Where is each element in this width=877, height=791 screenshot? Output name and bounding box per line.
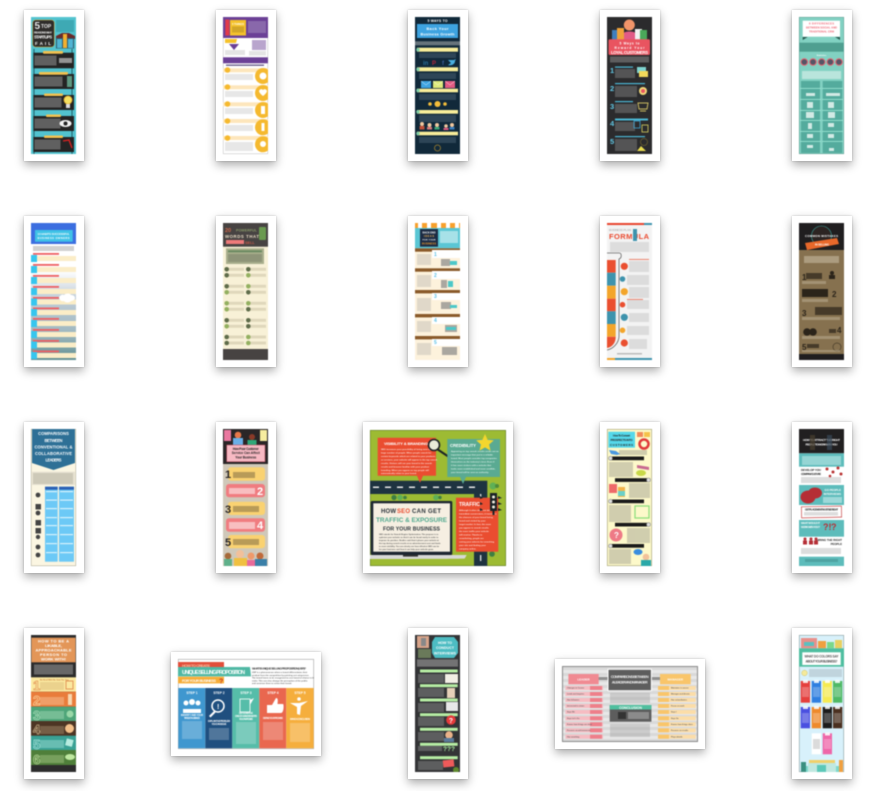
panel: traffic: TRAFFIC: [459, 502, 480, 508]
title ribbon: 8 DIFFERENCES: [809, 22, 834, 26]
tip illustrations: ?: [449, 718, 453, 725]
crowd of people: [224, 550, 267, 566]
title ribbon: BETWEEN SOCIAL AND: [806, 26, 837, 30]
laptop with headline: FOR YOUR BUSINESS: [383, 526, 441, 532]
dark title header: [223, 223, 268, 247]
card: comparisons between a leader and manager: Says We: [567, 712, 575, 714]
title banner: Reward Your: [614, 46, 645, 50]
card: how to create a unique selling proposition: ONE-OF-A-KIND BENEFITS: [235, 715, 257, 718]
header photos: [417, 636, 431, 658]
step icons: !: [217, 704, 219, 711]
panel: traffic: will receive. Thanks to: [459, 534, 483, 536]
awning: [415, 223, 460, 228]
numbered mistakes: 5: [802, 343, 807, 352]
numbered tags: [432, 250, 460, 346]
numbered rows: 5: [610, 137, 614, 146]
icon: loyalty cards: [637, 67, 648, 77]
title ribbons: ?: [219, 678, 223, 686]
card: comparisons between a leader and manager: Focus on work: [671, 706, 685, 708]
card: business plan formula: [600, 216, 660, 367]
numbered rows: 4: [610, 119, 615, 128]
panel: credibility: looks more established and more credible,: [451, 468, 496, 470]
columns: traditional and social CRM: [800, 81, 843, 153]
word rows: [228, 268, 266, 344]
numbered mistakes: 1: [802, 273, 807, 282]
title board: FOR YOUR: [422, 240, 436, 242]
panel: visibility and branding: [378, 438, 438, 483]
dark title header: SELL: [245, 241, 255, 245]
laptop with headline: improve its position. Studies said that it places your website at: [379, 539, 439, 542]
title hexagon: INTERVIEWS: [434, 652, 457, 656]
icon: cart: [638, 103, 648, 111]
blue header: [31, 223, 76, 244]
card: how to create a unique selling proposition: DEFINE YOUR PROMISE: [263, 717, 283, 720]
usp explanation: USP is a phenomenon where a brand differentiates their: [252, 671, 307, 674]
card: common mistakes in selling: [792, 216, 852, 367]
panel: traffic: immediate conversions, it increases: [459, 512, 497, 516]
card: 5 reasons why startups fail: [24, 10, 84, 161]
icon: network of dots: [826, 466, 842, 477]
dark header: PEOPLE TO WORK WITH YOU: [806, 442, 838, 446]
intro box: [226, 248, 264, 264]
title board: [420, 229, 438, 247]
laptop with headline: optimize your website so that it can be found easily in order to: [379, 536, 439, 539]
title block: PERSON TO: [40, 652, 67, 657]
dark header with banner: [799, 223, 844, 250]
icon: bulb: [434, 145, 440, 151]
card: how to create a unique selling proposition: YOU CAN SOLVE: [212, 723, 227, 726]
panel: visibility and branding: VISIBILITY & BRANDING: [384, 441, 428, 446]
icon: person: [829, 271, 835, 279]
card: back end ideas for your business: [408, 216, 468, 367]
card: what do colors say about your business: [792, 628, 852, 779]
card: things about a purple infographic: [216, 10, 276, 161]
card: how to create a unique selling proposition: LIST DOWN THE: [239, 712, 253, 715]
purple header: 5 THINGS: [232, 22, 244, 26]
dark header: HOW TO ATTRACT THE RIGHT: [803, 438, 840, 442]
dark header with agents: [223, 429, 268, 464]
title box: WHAT DO COLORS SAY: [804, 654, 839, 658]
panel: traffic: the chances of your brand being: [459, 516, 493, 519]
card: how to create a unique selling proposition: STEP 3: [240, 691, 252, 695]
icons: people: [420, 122, 454, 130]
title box: How Poor Customer: [233, 447, 260, 451]
formula steps: [620, 263, 628, 347]
panel: visibility and branding: results and become familiar with your product: [381, 466, 429, 468]
card: comparisons between a leader and manager: Manages and directs: [671, 693, 690, 696]
numbered mistakes: 4: [837, 326, 842, 335]
comparison columns: [45, 487, 74, 562]
title: 5 WAYS TO: [428, 19, 448, 23]
title block: LIKABLE,: [45, 643, 62, 648]
numbered mistakes: 3: [802, 309, 807, 318]
panel: visibility and branding: branding. When you appear on top people will: [381, 469, 429, 472]
numbered rows: [610, 66, 615, 146]
card: how poor customer service can affect your business: 5: [225, 537, 231, 549]
shop skyline: [801, 638, 842, 648]
card: comparisons between conventional and collaborative leaders: [24, 422, 84, 573]
six tip bands: [31, 677, 76, 765]
tip illustrations: ???: [443, 746, 455, 753]
title pennant: LEADERS: [46, 458, 62, 462]
icon: people: [803, 538, 818, 544]
card: comparisons between a leader and manager: Knows how things done: [671, 723, 693, 726]
panel: traffic: remarketing, people are: [459, 537, 484, 540]
panel: visibility and branding: SEO increases your possibility of being seen by a: [381, 448, 434, 451]
panel: traffic: found and visited by your: [459, 520, 486, 522]
icon: gifts: [634, 121, 648, 132]
panel: credibility: themselves as the industry's best. Even if: [451, 460, 495, 464]
category icons: [36, 493, 41, 557]
title ribbons: UNIQUE SELLING PROPOSITION: [182, 670, 245, 676]
laptop with headline: for your business and how it can help your website grow.: [379, 548, 434, 551]
panel: traffic: the more traffic your website: [459, 530, 490, 533]
panel: credibility: [447, 439, 500, 484]
illustrations: ?: [614, 531, 619, 540]
title box: [227, 445, 265, 462]
title banner: 5 Ways to: [620, 42, 640, 46]
card: how to be a likable approachable person to work with: 1: [33, 678, 40, 693]
card: habits of successful business owners: [24, 216, 84, 367]
title box: Service Can Affect: [232, 451, 261, 455]
card: back end ideas for your business: 4: [434, 318, 437, 324]
icon: magnifying glass: [428, 440, 449, 457]
card: how to create a unique selling proposition: [171, 652, 321, 756]
panel: visibility and branding: or services, your website will appear in the top search: [381, 458, 438, 462]
test tube chart: [607, 253, 621, 350]
title: PROSPECTS INTO: [610, 438, 633, 442]
dark title header: POWERFUL: [236, 228, 258, 232]
laptop with headline: [370, 501, 467, 559]
interview tips: [420, 670, 458, 759]
conclusion box: CONCLUSION: [619, 706, 642, 710]
icon: bulb: [802, 670, 807, 676]
card: comparisons between a leader and manager: Says Let's Go: [567, 717, 580, 720]
dark title header: WORDS THAT: [225, 234, 259, 239]
panel: visibility and branding: automatically relate to your brand.: [381, 472, 417, 475]
card: comparisons between a leader and manager: Says I: [671, 712, 677, 714]
usp explanation: The brand learns to be recognized as one brand of choice in the: [252, 677, 314, 680]
title badge: TOP: [41, 24, 52, 30]
card: comparisons between a leader and manager: Focuses on achievements: [567, 729, 591, 732]
card: comparisons between a leader and manager: Focuses on results: [671, 729, 688, 732]
laptop with headline: TRAFFIC & EXPOSURE: [376, 517, 448, 524]
laptop with headline: HOW: [381, 509, 396, 515]
dark header: [799, 429, 844, 453]
title ribbons: [178, 662, 251, 686]
title: [609, 228, 650, 241]
title badge: REASONS WHY: [34, 30, 52, 34]
card: how to create a unique selling proposition: STEP 5: [294, 691, 306, 695]
card: how to create a unique selling proposition: STEP 2: [213, 691, 225, 695]
card: how poor customer service can affect your business: 4: [257, 520, 264, 532]
title hexagon: [432, 637, 458, 658]
card: comparisons between a leader and manager: Knows how things are done: [567, 723, 592, 726]
usp explanation: product from the competition by pointing out uniqueness.: [252, 674, 310, 677]
icons: social: in: [423, 61, 429, 67]
panel: credibility: Appearing on top search results sends out an: [451, 450, 499, 453]
card: comparisons between a leader and manager: Has coaching: [567, 736, 580, 738]
centre title: [608, 669, 651, 691]
card: difference between social and traditional CRM: Statistics: [817, 54, 827, 57]
title: Back Your: [426, 27, 449, 31]
wooden shelves: [415, 248, 460, 339]
panel: visibility and branding: certain keywords which are related to your products: [381, 455, 436, 458]
card: how to conduct interviews: [408, 628, 468, 779]
card: how to attract the right people to work with you: WORK WITH YOU?: [801, 525, 820, 529]
card: how to create a unique selling proposition: YOU CAN PROVIDE: [239, 718, 253, 721]
laptop with headline: the top during search results at no advertisement cost and leads: [379, 542, 441, 545]
icon: question marks: [823, 522, 836, 532]
five topic rows: [223, 68, 268, 140]
manager rows: [659, 686, 696, 739]
centre title: COMPARISONS BETWEEN: [611, 674, 649, 679]
usp explanation: WHAT IS UNIQUE SELLING PROPOSITION (USP)?: [252, 666, 306, 670]
icon: money burst: [639, 87, 647, 95]
title ribbons: HOW TO CREATE: [182, 663, 210, 668]
usp explanation: niche. This can also change the perception of the public: [252, 679, 308, 682]
storefront: [801, 760, 843, 772]
title block: [32, 638, 76, 662]
card: how to create a unique selling proposition: TARGET AUDIENCE: [184, 717, 200, 720]
title hexagon: CONDUCT: [436, 646, 455, 650]
title badge: [33, 20, 54, 47]
card: how to attract the right people to work with you: HIRING THE RIGHT: [816, 538, 842, 542]
panel: traffic: you appear in search results: [459, 526, 489, 530]
title board: BACK END: [422, 232, 436, 234]
card: comparisons between a leader and manager: Has subordinates: [671, 699, 687, 702]
panel: credibility: CREDIBILITY: [450, 443, 476, 448]
heading: manager: MANAGER: [668, 678, 684, 682]
title ribbon: TRADITIONAL CRM: [809, 29, 835, 33]
title board: BUSINESS: [422, 242, 436, 246]
icons: social: f: [442, 61, 445, 67]
card: how to attract the right people to work with you: WHAT WOULD IT: [801, 521, 820, 525]
usp explanation: and convince them to select their brand.: [252, 682, 292, 685]
callout: placement: GET PLACEMENT MUST BE RIGHT: [805, 508, 838, 512]
panel: traffic: your site and finding your: [459, 544, 486, 547]
alternating bands: [799, 453, 844, 566]
five step columns: [178, 688, 314, 748]
card: 20 powerful words that sell: [216, 216, 276, 367]
title banner: LOYAL CUSTOMERS: [611, 50, 648, 55]
ten habit rows: [33, 253, 59, 352]
card: how to attract the right people to work with you: GO PEOPLE: [825, 488, 841, 492]
title: CUSTOMERS: [610, 443, 633, 447]
panel: credibility: it has more visitors with a website that: [451, 464, 491, 467]
panel: credibility: brand. Most people consider top companies: [451, 457, 498, 460]
title block: WORK WITH!: [41, 656, 66, 662]
title box: ABOUT YOUR BUSINESS?: [806, 660, 838, 664]
numbered mistakes: [802, 273, 842, 352]
card: how SEO can get traffic and exposure: [363, 422, 513, 573]
title ribbon: [803, 21, 840, 40]
panel: traffic: company online.: [459, 548, 477, 550]
card: comparisons between a leader and manager: Says Go: [671, 718, 679, 720]
icons: [65, 681, 75, 760]
dark header with banner: COMMON MISTAKES: [805, 234, 838, 238]
card: back end ideas for your business: 1: [434, 252, 437, 258]
title ribbons: FOR YOUR BUSINESS: [182, 679, 217, 683]
title box: Your Business: [235, 456, 257, 460]
card: how to create a unique selling proposition: MAKE A CONCLUSION: [290, 718, 310, 721]
icon: star: [476, 434, 494, 451]
card: how to be a likable approachable person to work with: [24, 628, 84, 779]
card: comparisons between a leader and manager: Has followers: [567, 700, 579, 702]
panel: visibility and branding: large number of people. When people search for: [381, 452, 431, 454]
icons: social: P: [432, 61, 436, 67]
reason panels: [33, 53, 74, 152]
title badge: STARTUPS: [34, 34, 52, 40]
panel: traffic: target market. In fact, the more: [459, 523, 492, 526]
card: comparisons between a leader and manager: Changes in Course: [567, 688, 584, 690]
card: 5 ways to back your business growth: [408, 10, 468, 161]
card: how poor customer service can affect your business: 3: [225, 504, 231, 516]
title: [417, 19, 458, 38]
title: How To Convert: [613, 434, 630, 438]
card: how to create a unique selling proposition: IDENTIFY AND YOUR: [181, 714, 203, 717]
card: how to be a likable approachable person to work with: 4: [33, 722, 41, 737]
title: BUSINESS PLAN: [609, 228, 631, 232]
card: 5 ways to reward your loyal customers: [600, 10, 660, 161]
header graphics: [609, 432, 650, 455]
card: how to attract the right people to work with you: COMPANY CULTURE: [801, 472, 821, 476]
title block: HOW TO BE A: [38, 638, 69, 644]
usp explanation: [252, 666, 316, 685]
title: [608, 432, 635, 448]
card: how to create a unique selling proposition: EXPLAIN THE PROBLEM: [208, 720, 230, 723]
section strips: [417, 48, 458, 135]
panel: traffic: Although it often does not deliver: [459, 509, 494, 512]
blue header: 10 HABITS SUCCESSFUL: [38, 232, 70, 236]
card: back end ideas for your business: 3: [434, 294, 437, 300]
numbered mistakes: 2: [832, 290, 837, 299]
card: comparisons between a leader and manager: Leads and inspires: [567, 694, 584, 696]
card: how to be a likable approachable person to work with: 5: [33, 737, 40, 752]
card: comparisons between a leader and manager: Interested in vision: [567, 705, 585, 708]
five speech bubbles: [228, 467, 265, 548]
title badge: F A I L: [35, 41, 51, 46]
card: comparisons between a leader and manager: Maintains in course: [671, 687, 689, 690]
dark header with banner: IN SELLING: [815, 242, 829, 246]
card: how to create a unique selling proposition: STEP 4: [267, 691, 279, 695]
icon: speedometer: [63, 140, 72, 148]
card: how to attract the right people to work with you: PEOPLE: [831, 542, 842, 546]
title pennant: COLLABORATIVE: [35, 451, 72, 456]
title pennant: [32, 429, 75, 470]
card: how to attract the right people to work with you: [792, 422, 852, 573]
leader rows: [565, 686, 603, 739]
numbered rows: 1: [610, 66, 614, 75]
card: how poor customer service can affect your business: [216, 422, 276, 573]
title pennant: CONVENTIONAL &: [34, 444, 73, 450]
card: how to be a likable approachable person to work with: Be Kind With No Gain For You: [40, 678, 69, 682]
title banner: [608, 39, 650, 55]
five ring charts: [801, 59, 842, 65]
card: comparisons between a leader and manager: Plays details: [671, 735, 682, 738]
card: how to be a likable approachable person to work with: 3: [33, 708, 40, 723]
panel: visibility and branding: results. Visitors will see your brand in the search: [381, 462, 433, 465]
title: FORMULA: [609, 232, 650, 241]
section headings: [610, 456, 650, 548]
card: how poor customer service can affect your business: 2: [257, 486, 263, 498]
heading: leader: LEADER: [577, 678, 590, 682]
panel: traffic: seeing your adverts for searching: [459, 540, 495, 544]
numbered rows: 2: [610, 84, 614, 93]
panel: traffic: [456, 498, 498, 552]
icon: traffic light: [480, 493, 502, 515]
title board: IDEAS: [424, 235, 434, 238]
laptop with headline: CAN GET: [412, 509, 441, 515]
card: back end ideas for your business: 5: [434, 340, 437, 346]
card: back end ideas for your business: 2: [434, 273, 437, 279]
laptop with headline: SEO stands for Search Engine Optimization. The purpose is to: [379, 533, 439, 536]
title pennant: BETWEEN: [44, 438, 63, 443]
icon: shopper with bags: [612, 20, 647, 41]
icon: bulb: [64, 96, 72, 108]
panel: credibility: important message that you're a reliable: [451, 454, 494, 456]
centre title: A LEADER AND MANAGER: [612, 680, 648, 684]
icon: speech bubbles: [800, 488, 822, 504]
title box: [802, 652, 841, 665]
laptop with headline: SEO: [397, 509, 410, 515]
blue header: BUSINESS OWNERS: [38, 236, 70, 240]
icons: stars: [428, 101, 447, 107]
title pennant: COMPARISONS: [38, 431, 69, 436]
dark title header: 20: [225, 228, 231, 234]
icons: social: [423, 59, 456, 67]
numbered rows: 3: [610, 102, 614, 111]
title: Business Growth: [420, 32, 455, 36]
trees: [391, 482, 499, 557]
title hexagon: HOW TO: [438, 641, 452, 645]
card: how to attract the right people to work with you: INTERVIEWS: [824, 492, 841, 496]
laptop with headline: to more visibility. You can clearly see how effective SEO can be: [379, 545, 440, 548]
card: how to be a likable approachable person to work with: 6: [33, 752, 40, 767]
icon: question marks: ?: [831, 522, 836, 532]
card: how to create a unique selling proposition: STEP 1: [186, 691, 198, 695]
card: comparisons between a leader and manager: [555, 659, 705, 749]
card: how to attract the right people to work with you: DEVELOP YOU: [801, 468, 821, 472]
title block: APPROACHABLE: [36, 648, 72, 652]
road: [370, 481, 487, 566]
colour cards: [801, 681, 842, 754]
tip illustrations: [443, 674, 458, 768]
card: how to be a likable approachable person to work with: 2: [33, 693, 40, 708]
icon: eye: [60, 120, 72, 127]
card: how poor customer service can affect your business: 1: [225, 469, 231, 481]
icons: envelopes: [421, 81, 455, 88]
statistics section: [225, 39, 266, 56]
title badge: 5: [34, 21, 40, 32]
icon: storefront: [56, 33, 75, 48]
icon: coins: [637, 138, 648, 151]
card: difference between social and traditional CRM: [792, 10, 852, 161]
card: how to convert prospects into customers: [600, 422, 660, 573]
icon: question marks: ?!: [823, 522, 832, 532]
panel: credibility: your brand will be seen as authority.: [451, 471, 489, 474]
